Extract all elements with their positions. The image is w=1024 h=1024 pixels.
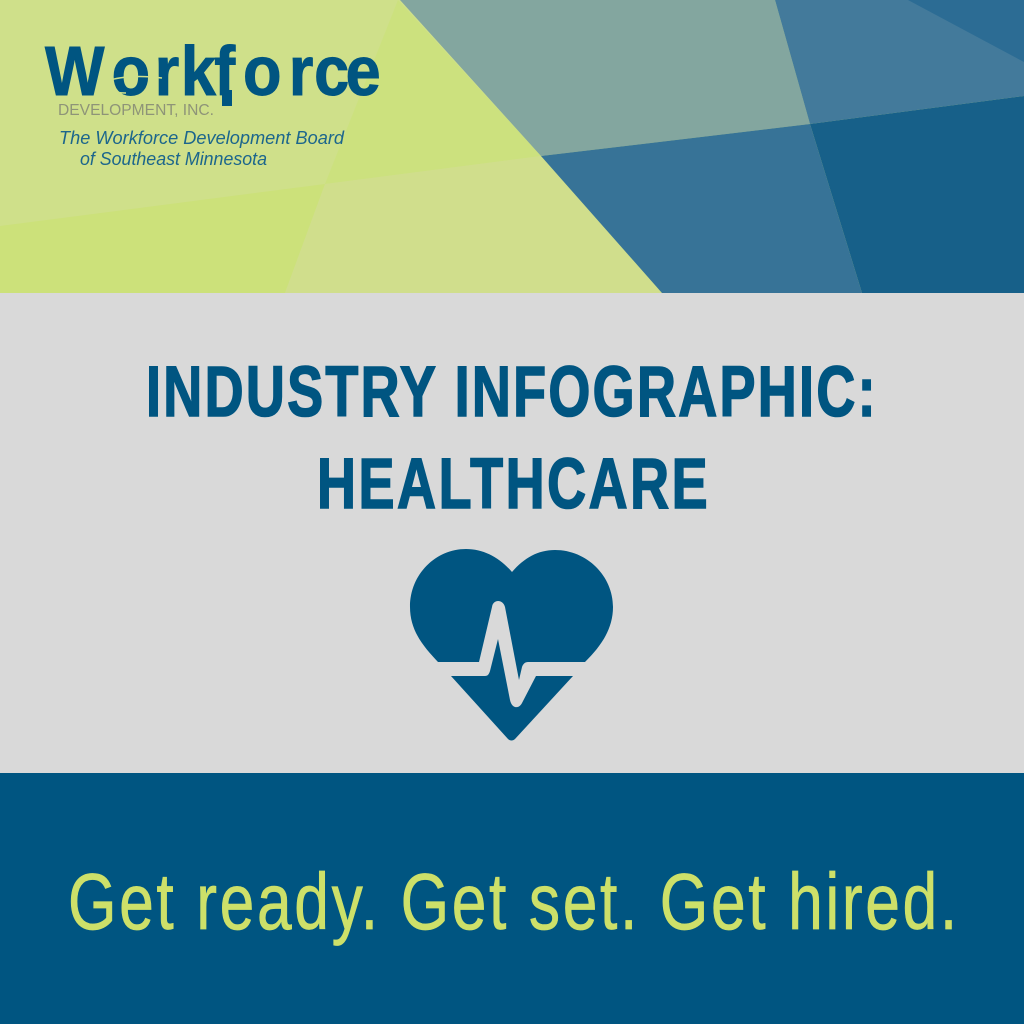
logo wordmark: Workforce <box>45 33 381 111</box>
icon: heart with pulse line <box>410 549 613 740</box>
logo swoosh <box>104 77 162 93</box>
logo tagline line 2: of Southeast Minnesota <box>80 149 267 169</box>
logo subtitle: DEVELOPMENT, INC. <box>58 102 214 119</box>
panel: geometric header banner <box>0 0 1024 293</box>
logo f descender <box>222 90 232 106</box>
footer slogan: Get ready. Get set. Get hired. <box>68 858 957 947</box>
logo: Workforce Development <box>45 33 381 169</box>
heading line 1: INDUSTRY INFOGRAPHIC: <box>146 353 876 432</box>
heading line 2: HEALTHCARE <box>317 445 708 524</box>
logo tagline line 1: The Workforce Development Board <box>59 128 345 148</box>
panel: footer band <box>0 773 1024 1024</box>
panel: title band <box>0 293 1024 773</box>
